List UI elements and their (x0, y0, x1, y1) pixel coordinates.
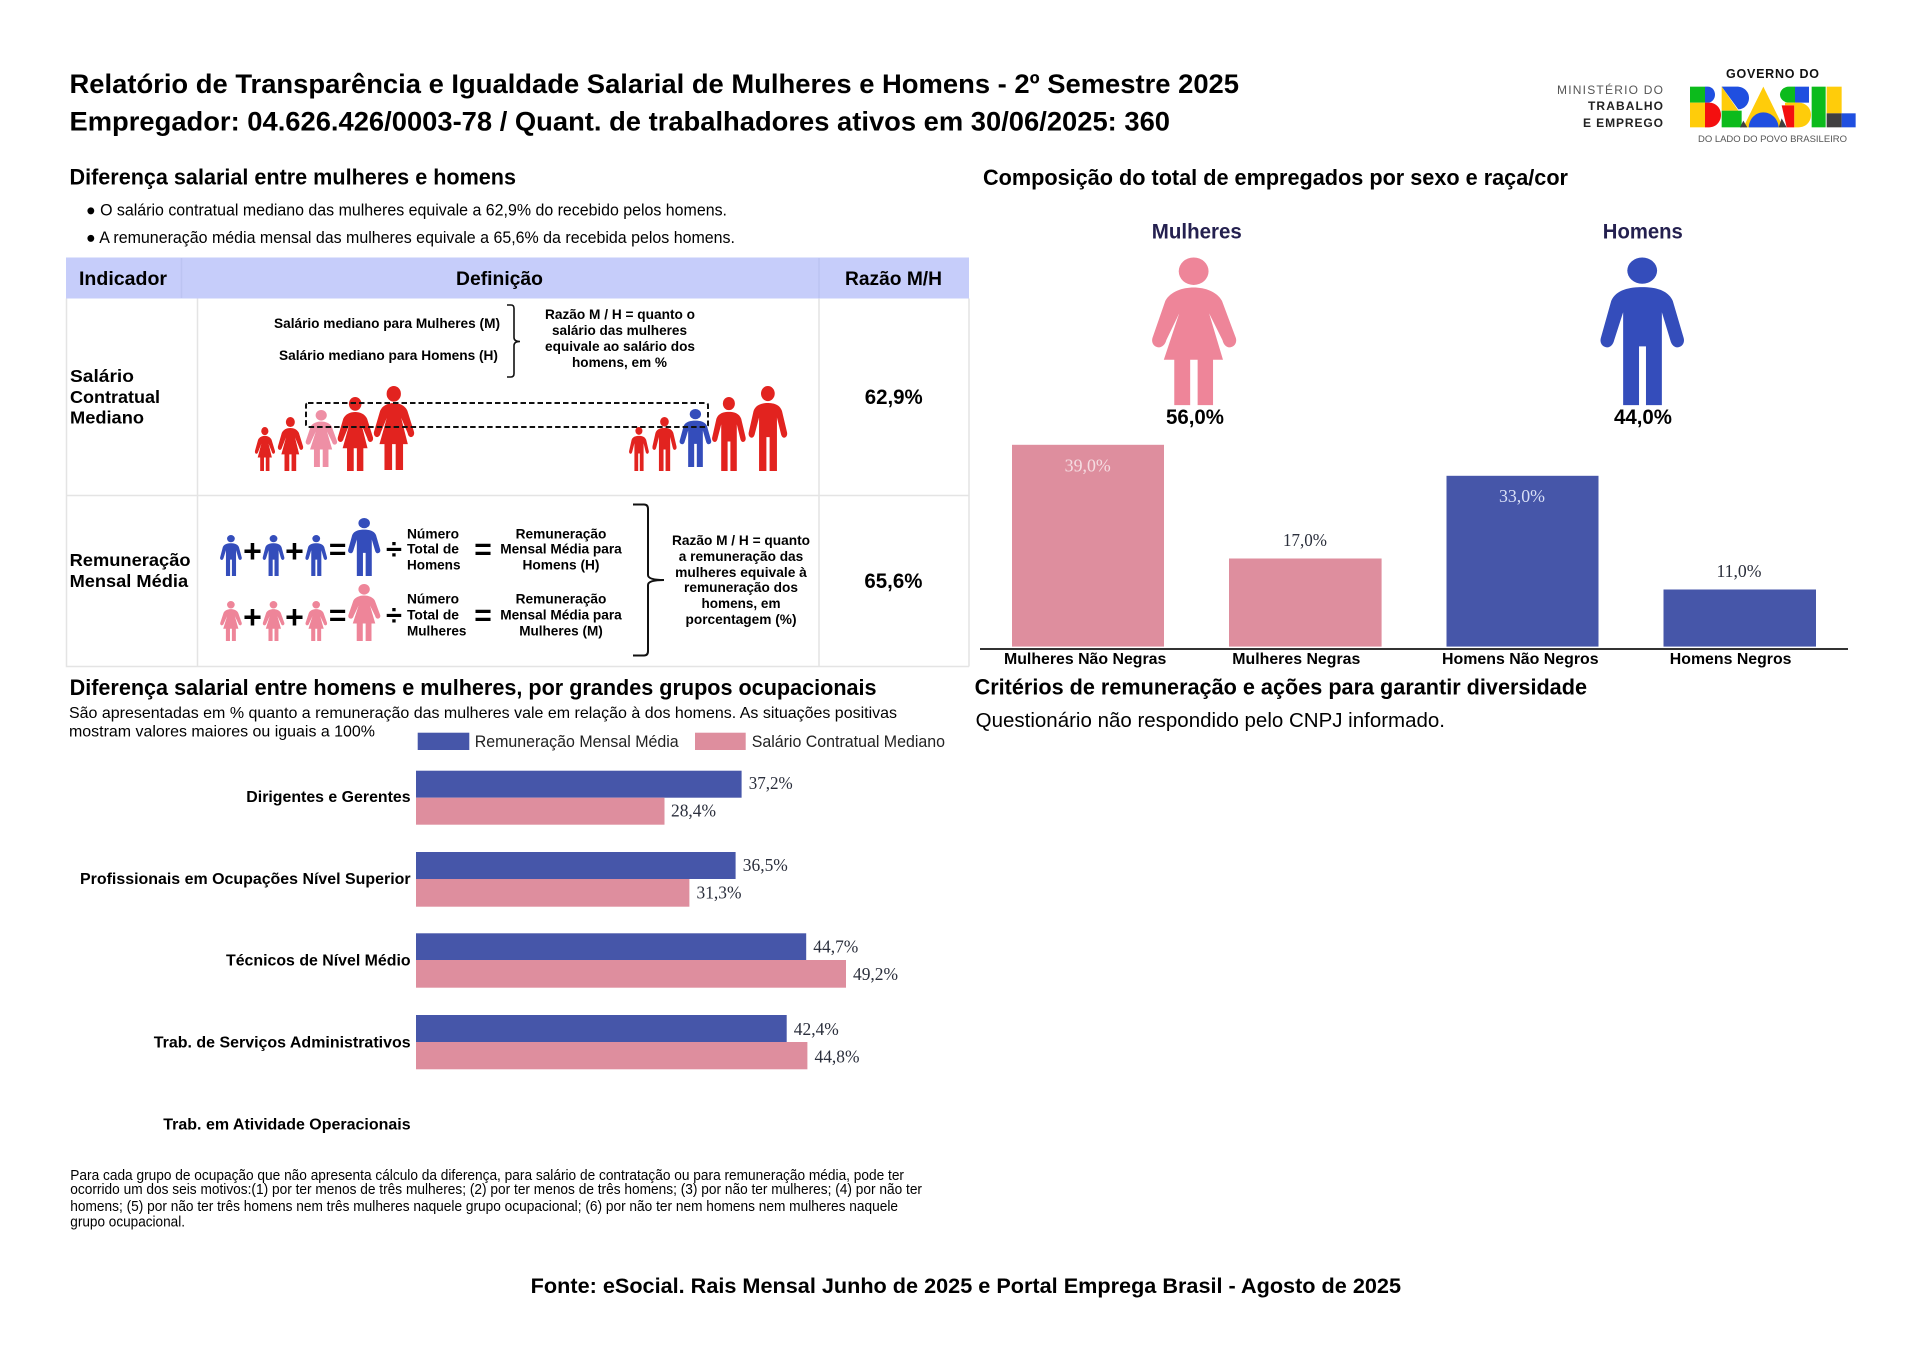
title: Empregador: 04.626.426/0003-78 / Quant. de trabalhadores ativos em 30/06/2025: 360 (70, 106, 1170, 136)
value: 56,0%: 56,0% (1166, 406, 1224, 429)
table header: Razão M/H (845, 268, 942, 290)
logo: governo do brasil (1690, 67, 1856, 145)
category: profissionais: 31,3% (696, 882, 742, 902)
category: técnicos: Técnicos de Nível Médio (226, 952, 411, 970)
icon: man (1601, 258, 1684, 405)
razão explanation: mulheres equivale à (675, 564, 807, 580)
logo: ministério (1557, 82, 1663, 130)
table header: Definição (456, 268, 543, 290)
category: dirigentes (246, 771, 793, 825)
formula: men: Remuneração (516, 526, 606, 542)
bullet list (86, 202, 735, 247)
formula: men: Homens (407, 557, 461, 573)
category: técnicos: 49,2% (853, 964, 898, 984)
formula: women: Mulheres (407, 623, 467, 639)
razão explanation: Razão M / H = quanto (672, 532, 810, 548)
formula: women: + (243, 599, 262, 635)
bar chart: sexo e raça: 17,0% (1283, 530, 1327, 550)
formula: men: Número (407, 526, 459, 542)
row: salário contratual mediano: Salário mediano para Mulheres (M) (274, 315, 500, 331)
heading: critérios: Critérios de remuneração e ações para garantir diversidade (975, 674, 1587, 700)
bar chart: sexo e raça: 33,0% (1499, 486, 1545, 506)
heading: diferença salarial: Diferença salarial entre mulheres e homens (70, 164, 516, 190)
heading: composição: Composição do total de empregados por sexo e raça/cor (983, 165, 1568, 190)
value: 65,6%: 65,6% (864, 570, 923, 593)
formula: women: Mensal Média para (500, 607, 622, 623)
legend: Remuneração Mensal Média (475, 733, 679, 751)
formula: men: + (285, 533, 304, 569)
razão explanation: a remuneração das (679, 548, 803, 564)
row: salário contratual mediano: Contratual (70, 387, 160, 407)
value: 44,0%: 44,0% (1614, 406, 1672, 429)
value: 62,9%: 62,9% (865, 386, 923, 409)
dashed median connector (306, 403, 708, 427)
description: São apresentadas em % quanto a remuneração das mulheres vale em relação à dos homens. As situações positivas (69, 705, 897, 722)
row: salário contratual mediano (70, 305, 923, 471)
text: questionário: Questionário não respondido pelo CNPJ informado. (976, 710, 1445, 732)
razão explanation: homens, em % (572, 354, 668, 370)
table (66, 258, 969, 666)
logo: ministério: TRABALHO (1588, 99, 1663, 113)
category: serviços administrativos: Trab. de Serviços Administrativos (154, 1035, 411, 1052)
logo: governo do brasil: GOVERNO DO (1726, 67, 1819, 81)
icon: women ordered by salary (255, 386, 414, 471)
formula: men: Homens (H) (522, 557, 600, 573)
logo: ministério: MINISTÉRIO DO (1557, 82, 1663, 97)
category: dirigentes: 37,2% (749, 773, 793, 793)
footnote: ocorrido um dos seis motivos:(1) por ter menos de três mulheres; (2) por ter menos de três homens; (3) por não ter mulheres; (4) por não ter (70, 1182, 922, 1198)
category: atividade operacional: Trab. em Atividade Operacionais (163, 1116, 411, 1133)
category: técnicos (226, 933, 898, 988)
formula: women: + (285, 599, 304, 635)
formula: women: Total de (407, 607, 459, 623)
razão explanation (545, 306, 695, 370)
bar chart: grupos (80, 771, 898, 1133)
formula: men: = (329, 533, 346, 566)
row: salário contratual mediano: Mediano (70, 408, 144, 428)
row: salário contratual mediano: Salário (70, 366, 134, 386)
row: salário contratual mediano: Salário mediano para Homens (H) (279, 347, 498, 363)
formula: men: = (474, 533, 492, 566)
logo: governo do brasil: DO LADO DO POVO BRASILEIRO (1698, 134, 1847, 145)
bar chart: sexo e raça: Homens Não Negros (1442, 651, 1599, 668)
razão explanation: Razão M / H = quanto o (545, 306, 695, 322)
title: Relatório de Transparência e Igualdade Salarial de Mulheres e Homens - 2º Semestre 2025 (70, 69, 1239, 99)
razão explanation: salário das mulheres (552, 322, 687, 338)
razão explanation: remuneração dos (684, 579, 798, 595)
label: mulheres: Mulheres (1152, 220, 1242, 244)
title (70, 69, 1239, 136)
formula: women: Número (407, 591, 459, 607)
icon: men ordered by salary (629, 386, 787, 471)
category: serviços administrativos (154, 1015, 860, 1069)
category: dirigentes: 28,4% (671, 801, 716, 821)
bar chart: sexo e raça: Homens Negros (1670, 651, 1792, 668)
row: remuneração mensal média: Remuneração (70, 550, 191, 570)
bar chart: sexo e raça: Mulheres Negras (1232, 651, 1360, 668)
table header (66, 258, 969, 298)
legend (418, 733, 945, 751)
razão explanation: homens, em (702, 595, 780, 611)
formula: women: ÷ (386, 600, 402, 632)
formula: women (220, 584, 622, 641)
category: serviços administrativos: 44,8% (814, 1046, 860, 1066)
bullet list: ● O salário contratual mediano das mulheres equivale a 62,9% do recebido pelos homens. (86, 202, 727, 220)
formula: men: Mensal Média para (500, 541, 622, 557)
logo: ministério: E EMPREGO (1583, 116, 1663, 130)
bar chart: sexo e raça (980, 445, 1848, 668)
formula: men: Total de (407, 541, 459, 557)
footnote: homens; (5) por não ter três homens nem três mulheres naquele grupo ocupacional; (6) por não ter nem homens nem mulheres naquele (70, 1199, 898, 1215)
razão explanation: porcentagem (%) (686, 611, 796, 627)
brace (507, 305, 520, 377)
razão explanation: equivale ao salário dos (545, 338, 695, 354)
table header: Indicador (79, 268, 167, 290)
row: remuneração mensal média (70, 504, 923, 656)
panel: critérios (975, 674, 1587, 732)
footnote: grupo ocupacional. (70, 1215, 185, 1231)
bar chart: sexo e raça: 11,0% (1716, 561, 1762, 581)
panel: grupos ocupacionais (69, 675, 945, 1231)
bar chart: sexo e raça: Mulheres Não Negras (1004, 651, 1166, 668)
category: técnicos: 44,7% (813, 937, 858, 957)
bullet list: ● A remuneração média mensal das mulheres equivale a 65,6% da recebida pelos homens. (86, 229, 735, 247)
razão explanation (672, 532, 810, 627)
formula: women: Remuneração (516, 591, 606, 607)
formula: women: Mulheres (M) (519, 623, 603, 639)
footer source: Fonte: eSocial. Rais Mensal Junho de 2025 e Portal Emprega Brasil - Agosto de 2025 (531, 1275, 1401, 1298)
description: mostram valores maiores ou iguais a 100% (69, 724, 375, 741)
icon: woman (1152, 258, 1236, 405)
panel: diferença salarial (66, 164, 969, 666)
label: homens: Homens (1603, 220, 1683, 244)
brace (633, 504, 664, 656)
category: profissionais: Profissionais em Ocupações Nível Superior (80, 871, 411, 888)
row: remuneração mensal média: Mensal Média (70, 571, 188, 591)
legend: Salário Contratual Mediano (752, 733, 945, 751)
heading: grupos ocupacionais: Diferença salarial entre homens e mulheres, por grandes grupos ocupacionais (70, 675, 877, 700)
formula: women: = (474, 599, 492, 632)
formula: men (220, 518, 622, 576)
bar chart: sexo e raça: 39,0% (1065, 455, 1111, 475)
category: serviços administrativos: 42,4% (794, 1019, 839, 1039)
description (69, 705, 897, 741)
category: dirigentes: Dirigentes e Gerentes (246, 789, 411, 806)
formula: men: ÷ (386, 534, 402, 566)
formula: women: = (329, 599, 346, 632)
formula: men: + (243, 533, 262, 569)
footnote: Para cada grupo de ocupação que não apresenta cálculo da diferença, para salário de contratação ou para remuneração média, pode ter (70, 1168, 904, 1184)
footnote (70, 1168, 922, 1231)
panel: composição (980, 165, 1848, 668)
category: profissionais: 36,5% (743, 855, 788, 875)
category: profissionais (80, 852, 788, 907)
